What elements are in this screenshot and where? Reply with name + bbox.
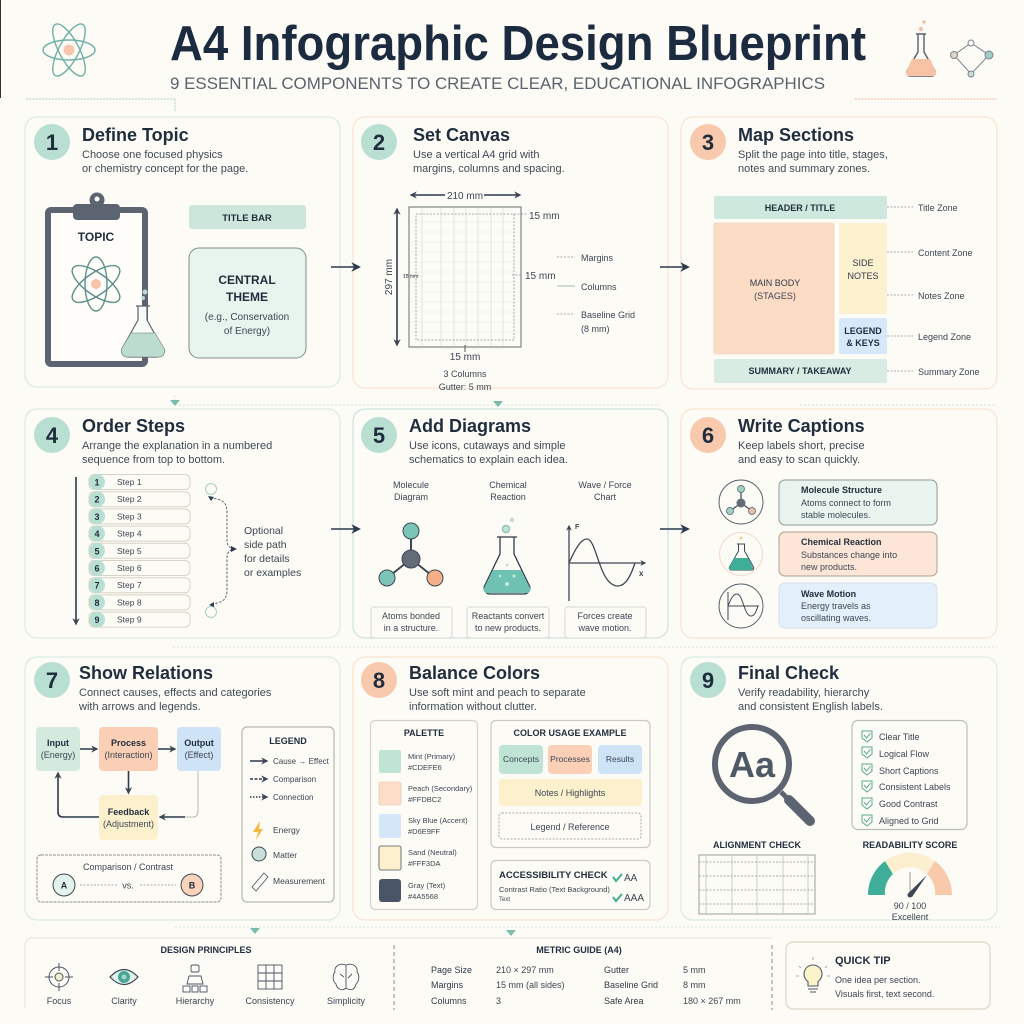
- zone layout: [714, 196, 887, 383]
- column: wave chart: [565, 480, 646, 638]
- icon: simplicity: [327, 964, 365, 1006]
- step number 7: 7: [46, 668, 58, 693]
- metric guide: [431, 945, 741, 1006]
- icon: light bulb: [796, 957, 830, 992]
- color usage example: Notes / Highlights: [535, 788, 606, 798]
- metric guide: Safe Area: [604, 996, 644, 1006]
- numbered step list: 1: [94, 478, 100, 488]
- side path note: or examples: [244, 567, 301, 579]
- icon: flask badge: [720, 532, 762, 576]
- checklist: [852, 720, 967, 830]
- description: Arrange the explanation in a numbered: [82, 440, 272, 452]
- description: Verify readability, hierarchy: [738, 687, 869, 699]
- description: margins, columns and spacing.: [413, 163, 565, 175]
- accessibility check: Text: [499, 897, 510, 903]
- zone labels: Title Zone: [918, 203, 958, 213]
- arrow: step 2 to step 3: [660, 266, 688, 268]
- column: molecule: Atoms bonded: [382, 611, 440, 621]
- panel 3: map sections: [681, 117, 997, 389]
- heading: Balance Colors: [409, 663, 540, 683]
- step number 2: [361, 124, 397, 160]
- legend: Comparison: [273, 775, 316, 784]
- comparison box: Comparison / Contrast: [83, 862, 174, 872]
- caption: wave: Energy travels as: [801, 601, 871, 611]
- palette panel: Sky Blue (Accent): [408, 816, 468, 825]
- column: reaction: [467, 480, 549, 638]
- accessibility check: Contrast Ratio (Text Background): [499, 885, 610, 894]
- caption: wave: Wave Motion: [801, 589, 856, 599]
- caption: wave: oscillating waves.: [801, 613, 871, 623]
- legend: Connection: [273, 793, 313, 802]
- icon: clarity: Clarity: [111, 996, 137, 1006]
- step number 5: 5: [373, 423, 385, 448]
- description: or chemistry concept for the page.: [82, 163, 248, 175]
- step number 3: [690, 124, 726, 160]
- column: molecule: Diagram: [394, 492, 428, 502]
- numbered step list: Step 7: [117, 580, 142, 590]
- numbered step list: 7: [94, 581, 100, 591]
- step number 9: 9: [702, 668, 714, 693]
- panel 6: write captions: [681, 409, 997, 638]
- heading: Order Steps: [82, 416, 185, 436]
- heading: Define Topic: [82, 125, 189, 145]
- accessibility check: ACCESSIBILITY CHECK: [499, 870, 608, 881]
- palette panel: #4A5568: [408, 892, 438, 901]
- step number 6: 6: [702, 423, 714, 448]
- heading: Final Check: [738, 663, 840, 683]
- description: Choose one focused physics: [82, 149, 223, 161]
- icon: molecule ring: [950, 40, 993, 77]
- column: reaction: Reactants convert: [472, 611, 545, 621]
- description: Split the page into title, stages,: [738, 149, 888, 161]
- flow diagram: Process: [111, 738, 146, 748]
- heading: Show Relations: [79, 663, 213, 683]
- quick tip: Visuals first, text second.: [835, 989, 934, 999]
- column: wave chart: Chart: [594, 492, 616, 502]
- numbered step list: 2: [94, 495, 100, 505]
- canvas grid diagram: 15 mm: [529, 211, 560, 222]
- color usage example: Legend / Reference: [530, 822, 610, 832]
- numbered step list: 6: [94, 564, 100, 574]
- canvas grid diagram: 210 mm: [447, 191, 483, 202]
- numbered step list: Step 4: [117, 529, 142, 539]
- palette panel: Gray (Text): [408, 881, 446, 890]
- zone layout: SIDE: [852, 258, 874, 268]
- comparison box: [37, 855, 221, 902]
- design principles: DESIGN PRINCIPLES: [160, 945, 252, 955]
- optional side path bracket: [206, 484, 237, 618]
- color usage example: COLOR USAGE EXAMPLE: [513, 728, 627, 738]
- step number 4: [34, 417, 70, 453]
- icon: magnifying glass: [715, 727, 810, 821]
- zone labels: [887, 203, 980, 377]
- caption: reaction: Substances change into: [801, 550, 897, 560]
- color usage example: Concepts: [503, 754, 539, 764]
- heading: Write Captions: [738, 416, 865, 436]
- checklist: Clear Title: [879, 732, 920, 742]
- central theme box: of Energy): [224, 326, 270, 337]
- metric guide: Margins: [431, 980, 464, 990]
- column: reaction: to new products.: [475, 623, 541, 633]
- metric guide: Page Size: [431, 965, 472, 975]
- palette panel: Sand (Neutral): [408, 848, 457, 857]
- accessibility check: AA: [624, 873, 638, 884]
- canvas grid diagram: 3 Columns: [443, 369, 487, 379]
- panel 7: show relations: [25, 657, 340, 920]
- panel 1: define topic: [25, 117, 340, 387]
- central theme box: (e.g., Conservation: [205, 312, 289, 323]
- metric guide: Columns: [431, 996, 467, 1006]
- icon: wave badge: [719, 584, 763, 628]
- zone layout: & KEYS: [846, 338, 880, 348]
- metric guide: 15 mm (all sides): [496, 980, 565, 990]
- caption: molecule: [779, 480, 937, 525]
- description: Connect causes, effects and categories: [79, 687, 271, 699]
- description: notes and summary zones.: [738, 163, 870, 175]
- icon: simplicity: Simplicity: [327, 996, 365, 1006]
- title bar: [189, 205, 306, 229]
- comparison box: vs.: [122, 880, 134, 890]
- description: Use soft mint and peach to separate: [409, 687, 586, 699]
- grid legend: Baseline Grid: [581, 310, 635, 320]
- zone layout: NOTES: [847, 271, 879, 281]
- alignment check: [699, 840, 815, 914]
- numbered step list: 4: [94, 529, 100, 539]
- quick tip: [786, 942, 990, 1009]
- quick tip: One idea per section.: [835, 975, 921, 985]
- canvas grid diagram: 15 mm: [403, 274, 418, 280]
- step number 1: 1: [46, 130, 58, 155]
- readability gauge: 90 / 100: [894, 901, 926, 911]
- palette panel: #D6E9FF: [408, 827, 441, 836]
- canvas grid diagram: 15 mm: [525, 271, 556, 282]
- step number 7: [34, 662, 70, 698]
- zone labels: Summary Zone: [918, 367, 980, 377]
- icon: consistency: Consistency: [245, 996, 295, 1006]
- bottom strip: design principles and metric guide: [25, 938, 772, 1010]
- canvas grid diagram: 297 mm: [384, 259, 395, 295]
- column: molecule: in a structure.: [384, 623, 438, 633]
- metric guide: Baseline Grid: [604, 980, 658, 990]
- grid legend: [557, 253, 635, 334]
- zone labels: Content Zone: [918, 248, 973, 258]
- column: molecule: Molecule: [393, 480, 429, 490]
- metric guide: Gutter: [604, 965, 629, 975]
- flow diagram: [36, 727, 221, 840]
- icon: hierarchy: Hierarchy: [176, 996, 215, 1006]
- header: [43, 17, 993, 93]
- step number 1: [34, 124, 70, 160]
- step number 6: [690, 417, 726, 453]
- numbered step list: Step 6: [117, 563, 142, 573]
- zone layout: MAIN BODY: [750, 278, 800, 288]
- accessibility check: AAA: [624, 893, 644, 904]
- checklist: Short Captions: [879, 766, 939, 776]
- flow diagram: Input: [47, 738, 69, 748]
- central theme box: THEME: [226, 290, 268, 304]
- central theme box: [189, 248, 306, 358]
- metric guide: 8 mm: [683, 980, 706, 990]
- checklist: Consistent Labels: [879, 782, 951, 792]
- side path note: side path: [244, 539, 287, 551]
- caption: reaction: [779, 532, 937, 576]
- flow diagram: (Effect): [185, 750, 213, 760]
- icon: atom: [43, 20, 95, 80]
- panel 9: final check: [681, 657, 997, 922]
- readability gauge: READABILITY SCORE: [863, 840, 957, 850]
- caption: reaction: Chemical Reaction: [801, 537, 882, 547]
- checklist: Good Contrast: [879, 799, 938, 809]
- palette panel: [370, 720, 478, 910]
- description: Use icons, cutaways and simple: [409, 440, 566, 452]
- alignment check: ALIGNMENT CHECK: [713, 840, 801, 850]
- zone layout: LEGEND: [844, 326, 882, 336]
- flow diagram: Feedback: [108, 807, 150, 817]
- arrow: step 4 to step 5: [331, 528, 359, 530]
- palette panel: #CDEFE6: [408, 763, 442, 772]
- description: schematics to explain each idea.: [409, 454, 568, 466]
- description: with arrows and legends.: [78, 701, 201, 713]
- description: and consistent English labels.: [738, 701, 883, 713]
- zone labels: Notes Zone: [918, 291, 965, 301]
- step number 8: 8: [373, 668, 385, 693]
- grid legend: Columns: [581, 282, 617, 292]
- palette panel: Mint (Primary): [408, 752, 456, 761]
- icon: magnifying glass: Aa: [729, 744, 776, 785]
- description: information without clutter.: [409, 701, 537, 713]
- subtitle: 9 ESSENTIAL COMPONENTS TO CREATE CLEAR, EDUCATIONAL INFOGRAPHICS: [170, 74, 825, 93]
- column: reaction: Reaction: [490, 492, 526, 502]
- zone labels: Legend Zone: [918, 332, 971, 342]
- palette panel: #FFF3DA: [408, 859, 441, 868]
- numbered step list: Step 9: [117, 615, 142, 625]
- quick tip: QUICK TIP: [835, 955, 891, 967]
- step number 8: [361, 662, 397, 698]
- numbered step list: Step 5: [117, 546, 142, 556]
- checklist: Logical Flow: [879, 749, 930, 759]
- numbered step list: 9: [94, 615, 100, 625]
- caption: reaction: new products.: [801, 562, 857, 572]
- metric guide: 180 × 267 mm: [683, 996, 741, 1006]
- column: molecule: [371, 480, 452, 638]
- column: wave chart: Forces create: [577, 611, 633, 621]
- step number 2: 2: [373, 130, 385, 155]
- flow diagram: (Interaction): [104, 750, 153, 760]
- grid legend: (8 mm): [581, 324, 610, 334]
- grid legend: Margins: [581, 253, 614, 263]
- zone layout: (STAGES): [754, 291, 796, 301]
- icon: clarity: [110, 970, 138, 1006]
- column: wave chart: x: [639, 569, 644, 578]
- palette panel: Peach (Secondary): [408, 784, 473, 793]
- icon: consistency: [245, 965, 295, 1006]
- step number 3: 3: [702, 130, 714, 155]
- canvas grid diagram: 15 mm: [450, 352, 480, 363]
- caption: molecule: Molecule Structure: [801, 485, 882, 495]
- panel 4: order steps: [25, 409, 340, 638]
- sequence arrow: [75, 477, 77, 624]
- legend: Energy: [273, 825, 301, 835]
- heading: Add Diagrams: [409, 416, 531, 436]
- column: reaction: Chemical: [489, 480, 527, 490]
- legend: Matter: [273, 850, 297, 860]
- column: wave chart: Wave / Force: [578, 480, 632, 490]
- heading: Map Sections: [738, 125, 854, 145]
- caption: molecule: stable molecules.: [801, 510, 871, 520]
- zone layout: SUMMARY / TAKEAWAY: [748, 366, 852, 376]
- numbered step list: Step 1: [117, 477, 142, 487]
- central theme box: CENTRAL: [218, 273, 276, 287]
- accessibility check: [491, 860, 650, 910]
- canvas grid diagram: [384, 191, 560, 392]
- color usage example: [491, 720, 650, 848]
- zone layout: HEADER / TITLE: [765, 203, 835, 213]
- numbered step list: Step 3: [117, 511, 142, 521]
- legend: [242, 727, 334, 902]
- readability gauge: Excellent: [892, 912, 929, 922]
- panel 2: set canvas: [353, 117, 668, 392]
- step number 5: [361, 417, 397, 453]
- flow diagram: Output: [184, 738, 214, 748]
- metric guide: 5 mm: [683, 965, 706, 975]
- panel 5: add diagrams: [353, 409, 668, 638]
- metric guide: 210 × 297 mm: [496, 965, 554, 975]
- caption: molecule: Atoms connect to form: [801, 498, 891, 508]
- numbered step list: Step 2: [117, 494, 142, 504]
- step number 4: 4: [46, 423, 59, 448]
- comparison box: B: [189, 880, 196, 890]
- panel 8: balance colors: [353, 657, 668, 920]
- title: A4 Infographic Design Blueprint: [170, 17, 866, 71]
- readability gauge: [863, 840, 957, 922]
- column: wave chart: wave motion.: [577, 623, 632, 633]
- side path note: Optional: [244, 525, 283, 537]
- column: wave chart: F: [575, 524, 580, 531]
- canvas grid diagram: Gutter: 5 mm: [439, 382, 491, 392]
- title bar: TITLE BAR: [222, 213, 272, 224]
- color usage example: Processes: [550, 754, 590, 764]
- heading: Set Canvas: [413, 125, 510, 145]
- description: Keep labels short, precise: [738, 440, 865, 452]
- description: and easy to scan quickly.: [738, 454, 860, 466]
- arrow: step 1 to step 2: [331, 266, 359, 268]
- icon: clipboard with atom and flask: TOPIC: [78, 230, 115, 244]
- icon: focus: [45, 963, 73, 1006]
- flow diagram: (Adjustment): [103, 819, 154, 829]
- icon: focus: Focus: [47, 996, 72, 1006]
- design principles: [45, 945, 365, 1006]
- description: Use a vertical A4 grid with: [413, 149, 540, 161]
- numbered step list: 8: [94, 598, 100, 608]
- caption: wave: [779, 583, 937, 628]
- numbered step list: [89, 474, 190, 628]
- icon: flask: [906, 20, 936, 76]
- metric guide: 3: [496, 996, 501, 1006]
- numbered step list: Step 8: [117, 597, 142, 607]
- icon: hierarchy: [176, 965, 215, 1006]
- step number 9: [690, 662, 726, 698]
- numbered step list: 5: [94, 546, 100, 556]
- comparison box: A: [61, 880, 68, 890]
- arrow: step 5 to step 6: [660, 528, 688, 530]
- color usage example: Results: [606, 754, 634, 764]
- legend: Cause → Effect: [273, 757, 330, 766]
- side path note: for details: [244, 553, 290, 565]
- checklist: Aligned to Grid: [879, 816, 939, 826]
- palette panel: #FFDBC2: [408, 795, 441, 804]
- legend: Measurement: [273, 876, 326, 886]
- icon: clipboard with atom and flask: [48, 192, 165, 364]
- flow diagram: (Energy): [41, 750, 75, 760]
- numbered step list: 3: [94, 512, 100, 522]
- metric guide: METRIC GUIDE (A4): [536, 945, 622, 955]
- palette panel: PALETTE: [404, 728, 444, 738]
- icon: molecule badge: [719, 480, 763, 524]
- description: sequence from top to bottom.: [82, 454, 225, 466]
- legend: LEGEND: [269, 736, 307, 746]
